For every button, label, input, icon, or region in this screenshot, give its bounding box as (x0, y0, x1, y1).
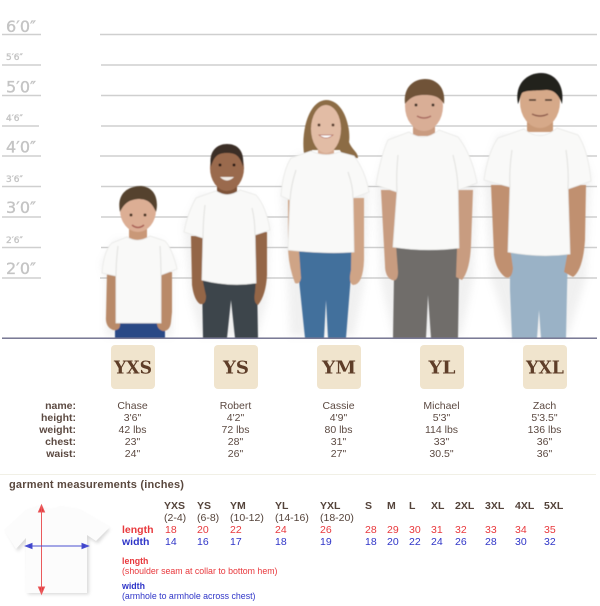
height labels: 2′0″ (6, 259, 36, 278)
stats: Michael: 114 lbs (425, 424, 458, 436)
size badge: YL: YL (427, 358, 456, 378)
garment measurements heading: garment measurements (inches) (9, 479, 184, 491)
child: Zach, YXL (484, 73, 591, 338)
stats: Michael: 5'3" (433, 412, 450, 424)
stats: Cassie: 27" (331, 448, 346, 460)
size table: 5XL (544, 500, 564, 512)
stats: Zach: 5'3.5" (531, 412, 558, 424)
size table: XL (431, 500, 445, 512)
size table: S (365, 500, 372, 512)
size table: length (122, 524, 154, 536)
size table: 29 (387, 524, 399, 536)
size table: M (387, 500, 396, 512)
child: Michael, YL (376, 79, 477, 338)
width definition: (armhole to armhole across chest) (122, 591, 256, 601)
stats: Cassie: 80 lbs (324, 424, 353, 436)
size table: 30 (515, 536, 527, 548)
size table: (14-16) (275, 512, 309, 524)
stats: Robert: 72 lbs (221, 424, 250, 436)
size table: 22 (409, 536, 421, 548)
stats: Michael: 33" (434, 436, 449, 448)
height labels: 2′6″ (6, 236, 23, 246)
size table: 16 (197, 536, 209, 548)
stats: Zach: 36" (537, 448, 552, 460)
stats: Zach: 136 lbs (528, 424, 561, 436)
row labels: chest: (45, 436, 76, 448)
size table: 26 (320, 524, 332, 536)
size table: YL (275, 500, 289, 512)
stats: Robert (220, 400, 251, 460)
stats: Zach (528, 400, 561, 460)
row labels: weight: (38, 424, 76, 436)
size table: 20 (387, 536, 399, 548)
stats: Cassie (322, 400, 355, 460)
size table: (6-8) (197, 512, 219, 524)
row labels: waist: (45, 448, 76, 460)
height chart rulers (2, 34, 597, 278)
size table: 24 (431, 536, 443, 548)
size badge: YS (214, 345, 258, 389)
height labels: 5′6″ (6, 53, 23, 63)
size badge: YM (317, 345, 361, 389)
height labels: 4′6″ (6, 114, 23, 124)
size table: 2XL (455, 500, 475, 512)
size table: 32 (455, 524, 467, 536)
size table: 26 (455, 536, 467, 548)
t-shirt diagram with arrows (4, 505, 110, 594)
stats: Zach: Zach (533, 400, 556, 412)
size table: 18 (275, 536, 287, 548)
size table: width (121, 536, 149, 548)
size table: 28 (485, 536, 497, 548)
size table: 32 (544, 536, 556, 548)
size table: 30 (409, 524, 421, 536)
stats: Chase: 24" (125, 448, 140, 460)
child: Chase, YXS (101, 186, 177, 338)
stats: Michael: Michael (423, 400, 460, 412)
size table: 28 (365, 524, 377, 536)
height labels: 5′0″ (6, 78, 36, 96)
stats: Chase (117, 400, 148, 460)
width definition: width (121, 581, 145, 591)
size table: 34 (515, 524, 527, 536)
stats: Michael: 30.5" (429, 448, 454, 460)
size table: YS (197, 500, 211, 512)
height labels: 3′0″ (6, 198, 36, 217)
size badge: YXL (523, 345, 567, 389)
stats: Robert: 28" (228, 436, 243, 448)
stats: Cassie: Cassie (322, 400, 355, 412)
size table: 35 (544, 524, 556, 536)
stats: Michael (423, 400, 460, 460)
size badge: YXL: YXL (525, 358, 564, 378)
size table: (18-20) (320, 512, 354, 524)
stats: Robert: Robert (220, 400, 251, 412)
row labels (38, 400, 76, 460)
size table: 33 (485, 524, 497, 536)
stats: Chase: 3'6" (124, 412, 141, 424)
chart baseline (2, 338, 597, 339)
stats: Robert: 26" (228, 448, 243, 460)
size table: 18 (165, 524, 177, 536)
size table: 24 (275, 524, 287, 536)
size table: 20 (197, 524, 209, 536)
length definition: (shoulder seam at collar to bottom hem) (122, 566, 278, 576)
child: Robert, YS (184, 144, 270, 338)
height labels: 4′0″ (6, 138, 36, 156)
height labels: 6′0″ (6, 17, 36, 36)
stats: Cassie: 31" (331, 436, 346, 448)
stats: Robert: 4'2" (227, 412, 244, 424)
size table: 17 (230, 536, 242, 548)
stats: Zach: 36" (537, 436, 552, 448)
size table: 14 (165, 536, 177, 548)
size table: 4XL (515, 500, 535, 512)
size table: 3XL (485, 500, 505, 512)
width definition (121, 581, 256, 601)
size table: L (409, 500, 416, 512)
stats: Chase: 23" (125, 436, 140, 448)
row labels: height: (41, 412, 76, 424)
size badge: YXS: YXS (113, 358, 152, 378)
size badge: YXS (111, 345, 155, 389)
row labels: name: (45, 400, 76, 412)
stats: Chase: Chase (117, 400, 148, 412)
stats: Cassie: 4'9" (330, 412, 347, 424)
size badge: YL (420, 345, 464, 389)
size table: (10-12) (230, 512, 264, 524)
size table: 31 (431, 524, 443, 536)
height labels: 3′6″ (6, 175, 23, 185)
child: Cassie, YM (281, 100, 369, 338)
length arrow (38, 505, 44, 594)
length definition (122, 556, 278, 576)
size table: 18 (365, 536, 377, 548)
size table: (2-4) (164, 512, 186, 524)
stats: Chase: 42 lbs (118, 424, 147, 436)
height labels (6, 17, 36, 278)
size table (121, 500, 564, 548)
size table: YXS (164, 500, 185, 512)
length definition: length (122, 556, 148, 566)
width arrow (26, 544, 88, 548)
size table: 19 (320, 536, 332, 548)
size table: YM (230, 500, 246, 512)
size badge: YM: YM (321, 358, 356, 378)
size table: 22 (230, 524, 242, 536)
size table: YXL (320, 500, 341, 512)
size badge: YS: YS (222, 358, 249, 378)
